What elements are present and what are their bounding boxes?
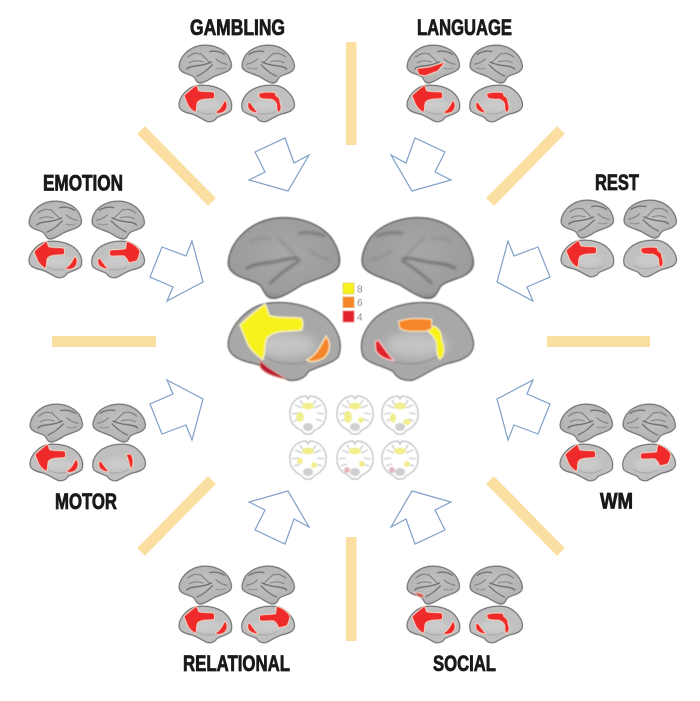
- panel: EMOTION: [29, 170, 145, 278]
- panel: SOCIAL: [407, 566, 523, 676]
- brain maps: emotion: [29, 201, 145, 278]
- panel: WM: [560, 404, 676, 514]
- brain maps: language: [407, 45, 523, 122]
- panel: central brain map: [228, 218, 473, 380]
- brain maps: relational: [179, 566, 295, 643]
- divider bars: [52, 42, 650, 641]
- label: LANGUAGE: LANGUAGE: [417, 15, 512, 40]
- legend: 6: [357, 298, 363, 309]
- panel: REST: [561, 170, 677, 277]
- legend: [343, 283, 363, 324]
- arrow: language: [391, 138, 451, 191]
- panel: RELATIONAL: [179, 566, 295, 676]
- legend: 8: [357, 284, 363, 296]
- label: REST: REST: [595, 170, 639, 195]
- arrow: motor: [150, 380, 203, 440]
- arrow: social: [391, 491, 451, 544]
- panel: MOTOR: [30, 404, 146, 514]
- arrow: gambling: [249, 138, 309, 191]
- arrow: relational: [249, 491, 309, 544]
- brain maps: motor: [30, 404, 146, 481]
- coronal brain slices: [290, 396, 418, 479]
- brain maps: rest: [561, 200, 677, 277]
- panel: GAMBLING: [179, 15, 295, 122]
- arrow: rest: [497, 241, 550, 301]
- label: EMOTION: EMOTION: [43, 170, 123, 196]
- label: WM: WM: [600, 488, 633, 514]
- central cortical surfaces: [228, 218, 473, 380]
- label: MOTOR: MOTOR: [55, 489, 117, 514]
- brain maps: social: [407, 566, 523, 643]
- legend: 4: [357, 312, 363, 324]
- brain maps: wm: [560, 404, 676, 481]
- label: SOCIAL: SOCIAL: [433, 651, 496, 676]
- panel: LANGUAGE: [407, 15, 523, 122]
- brain maps: gambling: [179, 45, 295, 122]
- arrow: emotion: [150, 241, 203, 301]
- label: RELATIONAL: RELATIONAL: [183, 651, 290, 676]
- arrow: wm: [497, 380, 550, 440]
- label: GAMBLING: GAMBLING: [190, 15, 285, 40]
